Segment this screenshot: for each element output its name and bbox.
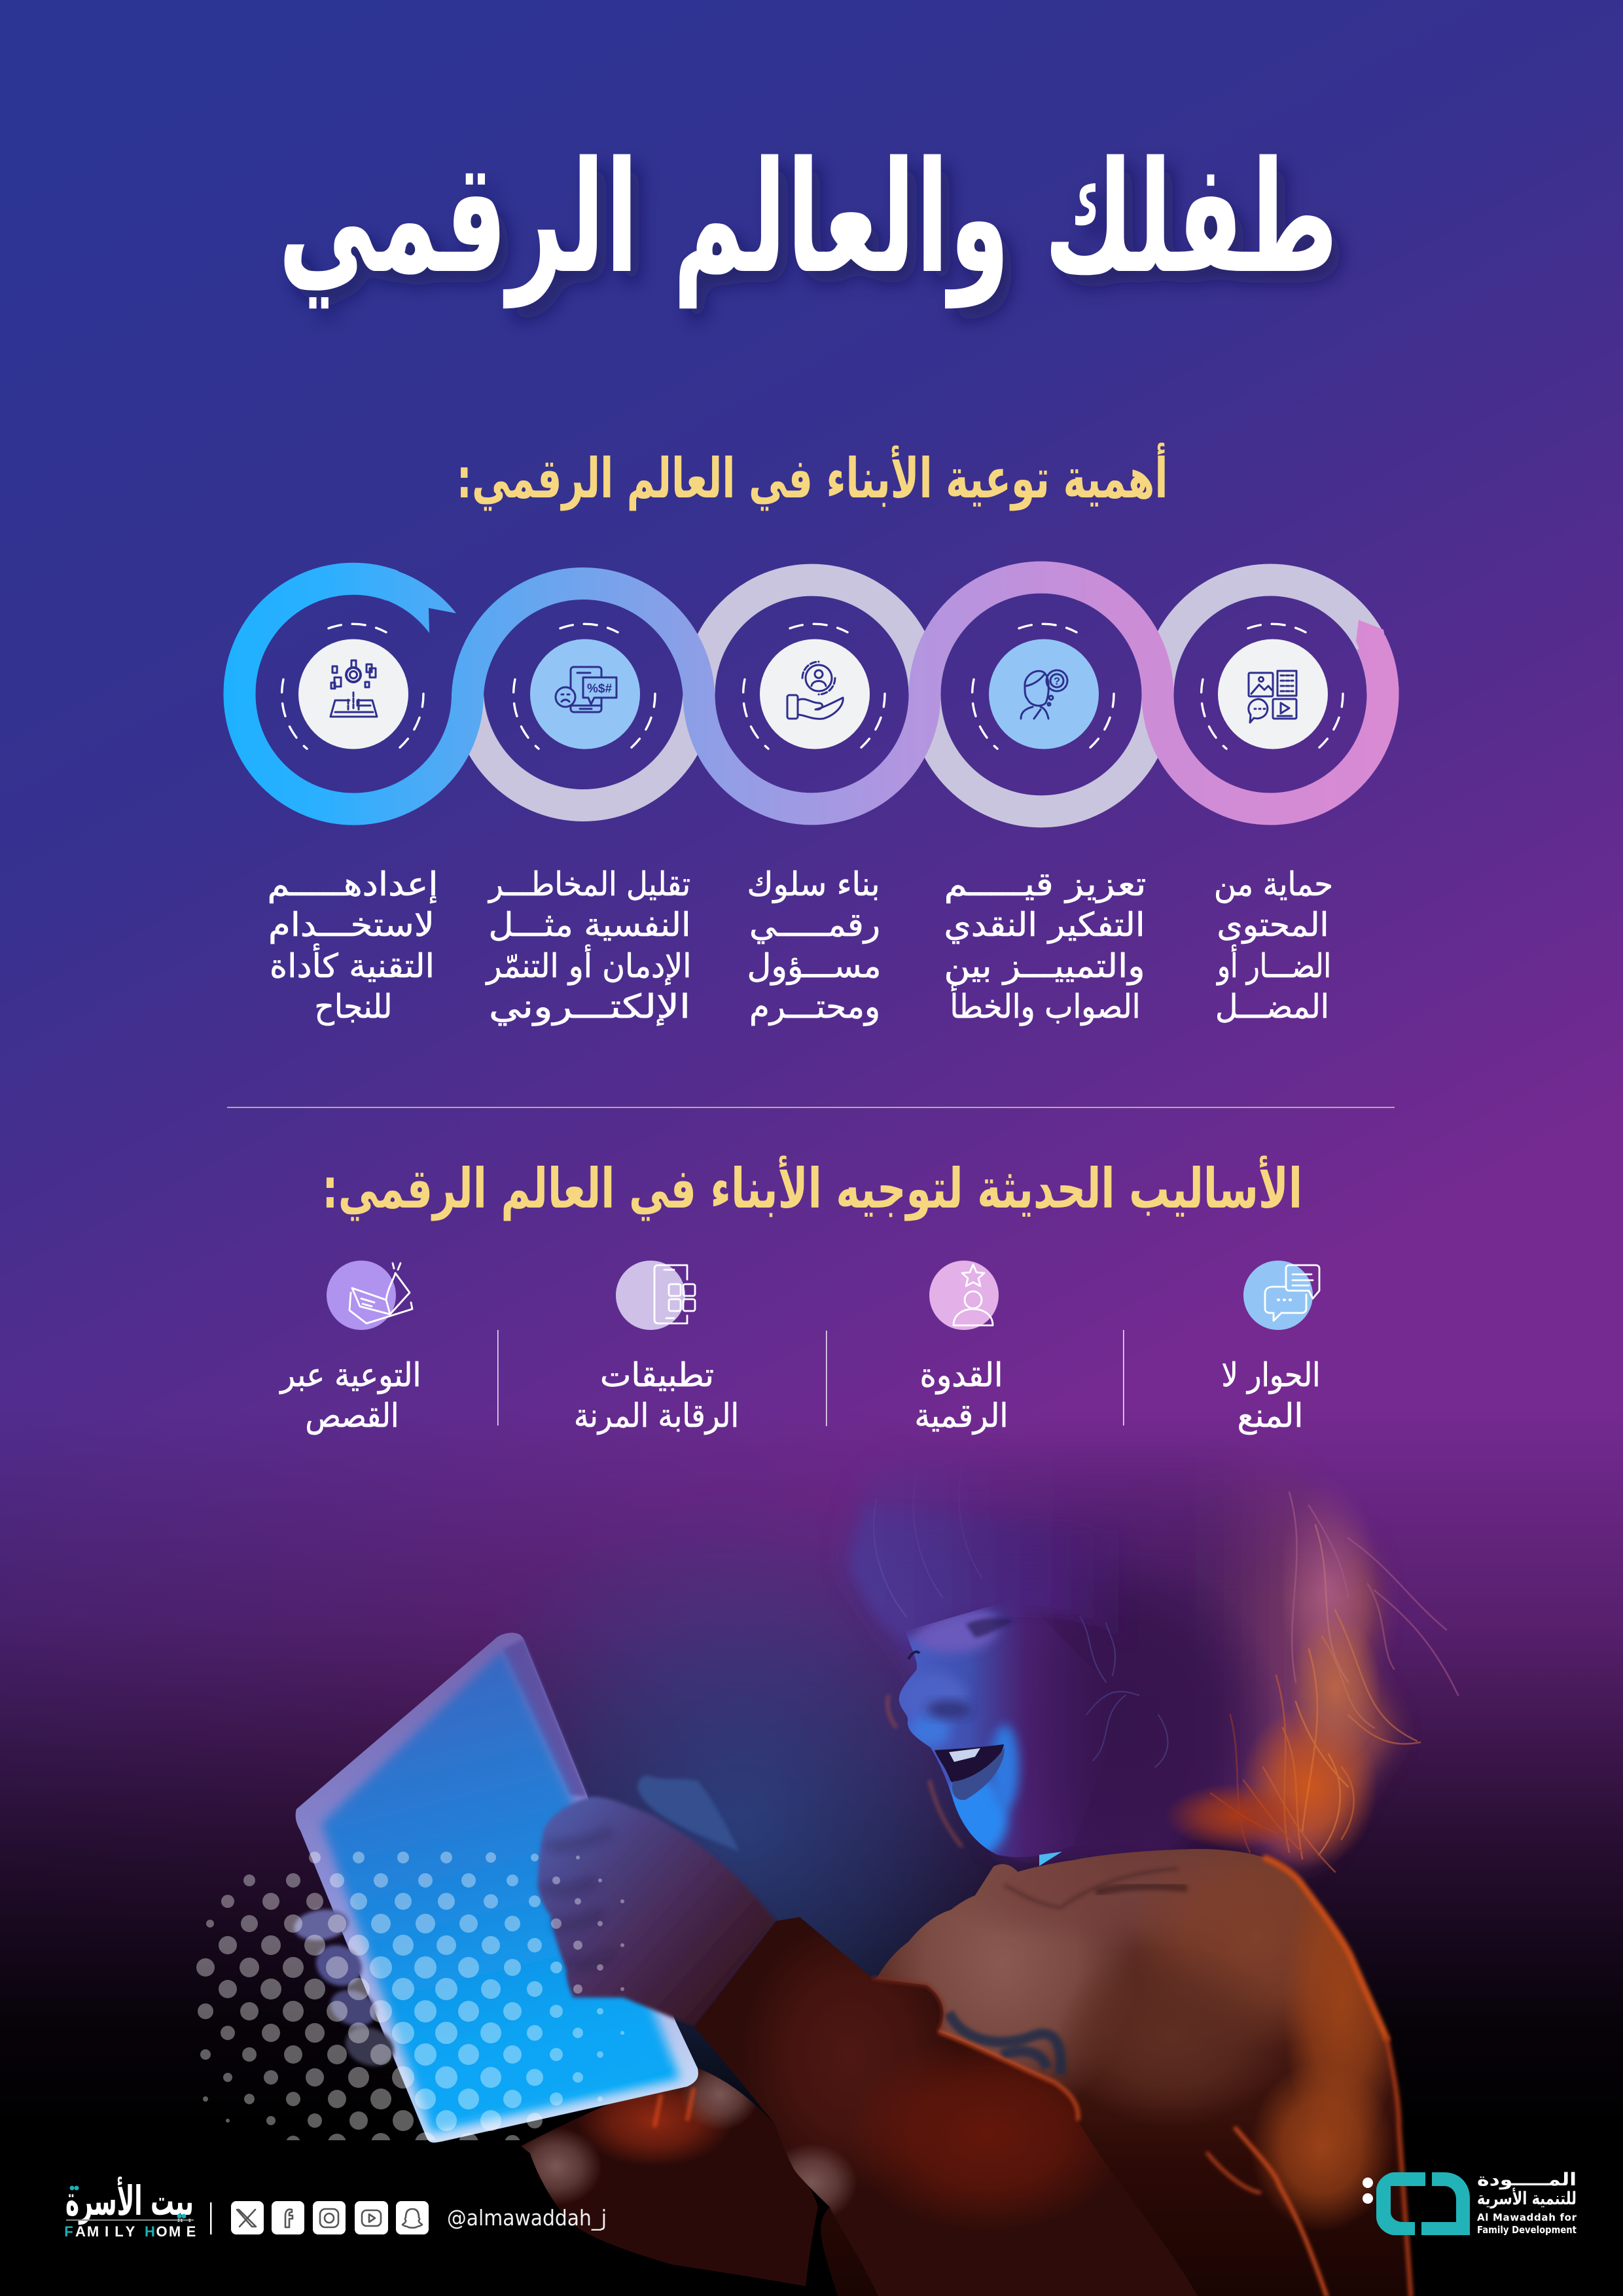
- footer: family home logo: بيت الأسرة: [65, 2176, 194, 2225]
- heading: importance of awareness: أهمية توعية الأبناء في العالم الرقمي:: [457, 442, 1168, 511]
- arrow head: [383, 569, 456, 633]
- role model label: [915, 1356, 1008, 1435]
- icon: facebook: [272, 2201, 304, 2234]
- column: preparing for technology use: التقنية كأداة: [270, 943, 435, 985]
- eyes: [966, 1618, 1014, 1638]
- monitoring apps label: الرقابة المرنة: [574, 1397, 739, 1435]
- fringe over forehead: [854, 1501, 1107, 1643]
- logo wordmark: Family Development: [1477, 2224, 1577, 2236]
- method: flexible monitoring apps: [574, 1261, 739, 1435]
- back hand fingers: [292, 1906, 399, 2072]
- ring chain diagram: [240, 569, 1389, 812]
- hair strands: [1211, 1492, 1458, 1872]
- column: protection from harmful content: الضـــار أو: [1216, 944, 1331, 986]
- role model label: القدوة: [920, 1356, 1003, 1395]
- social handle: @almawaddah_j: [447, 2205, 607, 2231]
- column: reducing psychological risks: الإدمان أو التنمّر: [485, 944, 691, 986]
- footer: family home logo: L: [115, 2223, 124, 2240]
- ribbon end: [1356, 620, 1389, 661]
- dialogue label: [1221, 1356, 1321, 1435]
- step 5 node: [1202, 624, 1343, 749]
- front hand: [538, 1797, 776, 2026]
- column: reducing psychological risks: الإلكتـــروني: [489, 988, 690, 1026]
- step 1 node: [282, 624, 423, 749]
- logo mark: [1363, 2172, 1470, 2235]
- column: critical thinking: والتمييـــز بين: [944, 947, 1145, 986]
- monitoring apps label: [574, 1356, 739, 1435]
- footer: family home logo: [64, 2176, 196, 2240]
- tablet: [296, 1633, 698, 2143]
- neck highlight: [1039, 1852, 1062, 1866]
- step 2 node: [514, 624, 655, 749]
- hoodie body: [821, 1849, 1410, 2296]
- footer: Al Mawaddah logo: [1363, 2170, 1577, 2236]
- social icons: [231, 2201, 429, 2234]
- icon: chat bubbles: [1265, 1265, 1319, 1321]
- column: critical thinking: تعزيز قيـــــم: [944, 865, 1147, 903]
- footer: family home logo: M: [87, 2223, 99, 2240]
- stories label: [279, 1356, 421, 1435]
- icon: media content: [1249, 671, 1296, 723]
- footer: family home logo: F: [64, 2223, 73, 2240]
- tablet glow: [425, 1492, 1054, 2147]
- footer: family home logo: M: [169, 2223, 181, 2240]
- footer separator: [210, 2202, 212, 2234]
- thumb: [637, 1776, 740, 1852]
- icon: phone with cyberbullying: %$#: [587, 682, 612, 696]
- icon: youtube: [355, 2201, 388, 2234]
- method dividers: [497, 1330, 1124, 1426]
- logo wordmark: للتنمية الأسرية: [1477, 2187, 1577, 2209]
- face: [883, 1605, 1078, 1857]
- heading: modern methods: الأساليب الحديثة لتوجيه الأبناء في العالم الرقمي:: [322, 1155, 1302, 1221]
- dialogue label: الحوار لا: [1221, 1356, 1321, 1394]
- footer: family home logo: H: [145, 2223, 155, 2240]
- logo wordmark: [1477, 2170, 1577, 2236]
- footer: family home logo: E: [187, 2223, 196, 2240]
- halftone dots: [196, 1852, 624, 2153]
- method: digital role model: [915, 1261, 1008, 1435]
- coloured ribbon: [240, 569, 1389, 809]
- curly hair highlights: [1080, 1617, 1168, 1767]
- footer: family home logo: Y: [126, 2223, 135, 2240]
- icon: instagram: [313, 2201, 346, 2234]
- logo wordmark: Al Mawaddah for: [1477, 2212, 1577, 2223]
- method: awareness through stories: [279, 1261, 421, 1435]
- stories label: التوعية عبر: [279, 1356, 421, 1394]
- icon: hand holding person: [787, 662, 843, 719]
- step 3 node: [743, 624, 885, 749]
- column: preparing for technology use: لاستخـــدام: [268, 906, 435, 944]
- footer: family home logo: O: [156, 2223, 168, 2240]
- column: responsible digital behaviour: ومحتـــرم: [749, 988, 880, 1026]
- icon: digital gear on tablet: [330, 660, 377, 717]
- icon: open book: [349, 1263, 412, 1323]
- mouth: [935, 1744, 1004, 1783]
- dialogue label: المنع: [1237, 1397, 1304, 1435]
- role model label: الرقمية: [915, 1397, 1008, 1435]
- section divider: [227, 1107, 1395, 1108]
- column: preparing for technology use: [267, 865, 438, 1026]
- method: dialogue: [1221, 1261, 1321, 1435]
- column: preparing for technology use: للنجاح: [314, 988, 393, 1026]
- icon: snapchat: [396, 2201, 429, 2234]
- grey track: [467, 580, 1383, 812]
- step 4 node: [972, 624, 1114, 749]
- icon: phone with app grid: [654, 1265, 695, 1323]
- column: protection from harmful content: المضـــل: [1215, 988, 1329, 1026]
- column: responsible digital behaviour: رقمـــــي: [749, 906, 880, 944]
- icon: person with star: [954, 1265, 993, 1325]
- column: responsible digital behaviour: بناء سلوك: [747, 865, 880, 903]
- back arm sleeve: [521, 2068, 818, 2286]
- logo wordmark: المـــــودة: [1477, 2170, 1577, 2190]
- column: critical thinking: الصواب والخطأ: [950, 984, 1140, 1026]
- column: critical thinking: التفكير النقدي: [944, 906, 1145, 944]
- front sleeve: [687, 1911, 1211, 2296]
- column: protection from harmful content: [1214, 865, 1333, 1026]
- column: protection from harmful content: المحتوى: [1217, 906, 1329, 944]
- hoodie rim light: [1207, 1858, 1411, 2296]
- column: reducing psychological risks: تقليل المخاطـــر: [487, 865, 690, 903]
- footer: family home logo: I: [105, 2223, 109, 2240]
- column: reducing psychological risks: النفسية مثـــل: [488, 906, 691, 944]
- hair: [847, 1465, 1405, 1876]
- monitoring apps label: تطبيقات: [600, 1356, 714, 1394]
- column: reducing psychological risks: [485, 865, 691, 1026]
- column: responsible digital behaviour: [747, 865, 881, 1026]
- icon: X: [231, 2201, 264, 2234]
- footer: family home logo: A: [75, 2223, 86, 2240]
- icon: thinking child: ?: [1054, 676, 1060, 687]
- photo: child with glowing tablet: [196, 1424, 1458, 2296]
- icon: phone with cyberbullying: [556, 667, 616, 712]
- column: preparing for technology use: إعدادهـــــم: [267, 865, 438, 904]
- column: protection from harmful content: حماية من: [1214, 865, 1333, 903]
- column: critical thinking: [944, 865, 1147, 1026]
- column: responsible digital behaviour: مســـؤول: [747, 947, 881, 986]
- icon: thinking child: [1021, 670, 1067, 719]
- stories label: القصص: [305, 1397, 399, 1435]
